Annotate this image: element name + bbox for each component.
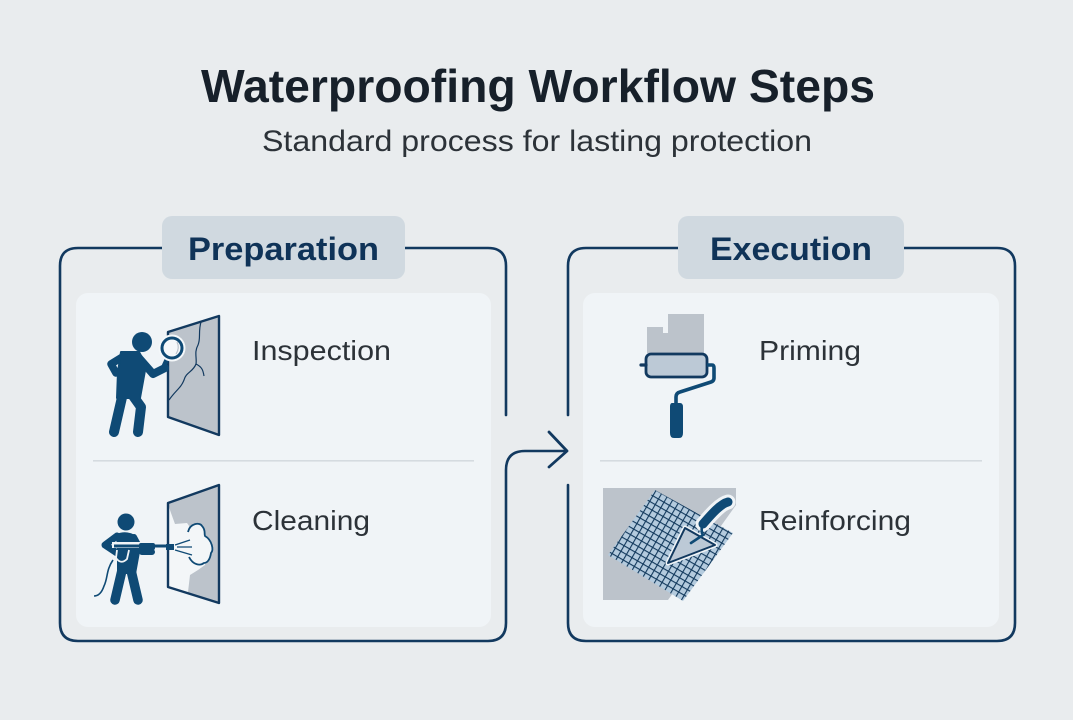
execution frame outline <box>568 248 1015 641</box>
execution inner card <box>583 293 999 627</box>
preparation heading tab: Preparation <box>188 231 379 267</box>
preparation frame outline <box>60 248 565 641</box>
panel: preparation <box>60 216 565 641</box>
preparation heading tab <box>162 216 405 279</box>
divider <box>600 460 982 462</box>
icon: mesh and trowel <box>603 488 736 601</box>
execution heading tab: Execution <box>710 231 872 267</box>
icon: cleaning worker with pressure washer <box>94 485 219 603</box>
divider <box>93 460 474 462</box>
arrow: preparation to execution <box>549 432 567 467</box>
title: Waterproofing Workflow Steps <box>201 60 875 112</box>
execution heading tab <box>678 216 904 279</box>
label: priming: Priming <box>759 335 861 366</box>
preparation inner card <box>76 293 491 627</box>
label: cleaning: Cleaning <box>252 505 370 536</box>
label: inspection: Inspection <box>252 335 391 366</box>
panel: execution <box>568 216 1015 641</box>
subtitle: Standard process for lasting protection <box>262 125 812 158</box>
icon: inspection worker with magnifier and cracked wall <box>111 316 219 435</box>
icon: paint roller <box>641 314 714 438</box>
label: reinforcing: Reinforcing <box>759 505 911 536</box>
